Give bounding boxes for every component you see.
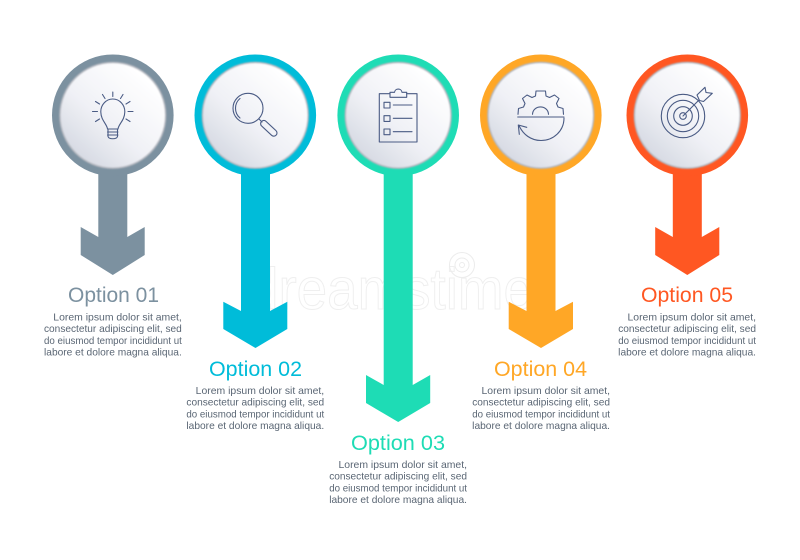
text 04 bbox=[472, 386, 610, 432]
text 02: do eiusmod tempor incididunt ut bbox=[186, 410, 324, 420]
text 01 bbox=[44, 312, 182, 358]
ring 01 bbox=[52, 55, 174, 176]
arrow 01 bbox=[81, 170, 145, 275]
text 02 bbox=[186, 386, 325, 432]
text 02: Lorem ipsum dolor sit amet, bbox=[196, 386, 324, 397]
text 04: Lorem ipsum dolor sit amet, bbox=[482, 386, 610, 397]
text 03: do eiusmod tempor incididunt ut bbox=[329, 484, 467, 494]
icon: target with arrow bbox=[661, 87, 712, 138]
option 03 column bbox=[329, 55, 467, 506]
text 05: do eiusmod tempor incididunt ut bbox=[618, 336, 756, 347]
option 04 column bbox=[472, 55, 610, 432]
text 04: labore et dolore magna aliqua. bbox=[472, 421, 610, 432]
text 03 bbox=[329, 460, 467, 506]
arrow 04 bbox=[509, 170, 573, 348]
option 02 column bbox=[186, 55, 325, 432]
text 05: consectetur adipiscing elit, sed bbox=[618, 324, 756, 335]
text 03: labore et dolore magna aliqua. bbox=[329, 495, 467, 506]
arrow 02 bbox=[223, 170, 287, 348]
text 03: consectetur adipiscing elit, sed bbox=[329, 472, 467, 482]
text 01: consectetur adipiscing elit, sed bbox=[44, 324, 182, 335]
icon: magnifier bbox=[233, 93, 278, 137]
icon: clipboard bbox=[379, 89, 417, 142]
title 03: Option 03 bbox=[351, 431, 445, 455]
arrow 05 bbox=[655, 170, 719, 275]
option 01 column bbox=[44, 55, 182, 359]
text 03: Lorem ipsum dolor sit amet, bbox=[338, 460, 467, 471]
icon: gear and cycle arrow bbox=[518, 91, 564, 140]
icon: light bulb bbox=[92, 92, 133, 139]
text 05: Lorem ipsum dolor sit amet, bbox=[628, 312, 756, 324]
text 01: Lorem ipsum dolor sit amet, bbox=[53, 312, 182, 324]
arrow 03 bbox=[366, 170, 430, 422]
title 02: Option 02 bbox=[209, 357, 302, 381]
text 02: consectetur adipiscing elit, sed bbox=[186, 398, 325, 408]
ring 04 bbox=[480, 55, 602, 176]
text 02: labore et dolore magna aliqua. bbox=[186, 421, 324, 432]
text 01: do eiusmod tempor incididunt ut bbox=[44, 336, 182, 347]
text 04: do eiusmod tempor incididunt ut bbox=[472, 410, 610, 420]
ring 05 bbox=[626, 55, 748, 176]
text 05 bbox=[618, 312, 756, 358]
ring 02 bbox=[194, 55, 316, 176]
ring 03 bbox=[337, 55, 459, 176]
title 05: Option 05 bbox=[641, 283, 733, 307]
text 01: labore et dolore magna aliqua. bbox=[44, 348, 182, 358]
text 05: labore et dolore magna aliqua. bbox=[618, 348, 756, 358]
option 05 column bbox=[618, 55, 756, 359]
watermark: dreamstime bbox=[248, 257, 534, 322]
text 04: consectetur adipiscing elit, sed bbox=[472, 398, 610, 408]
title 01: Option 01 bbox=[68, 283, 159, 307]
title 04: Option 04 bbox=[494, 357, 587, 381]
